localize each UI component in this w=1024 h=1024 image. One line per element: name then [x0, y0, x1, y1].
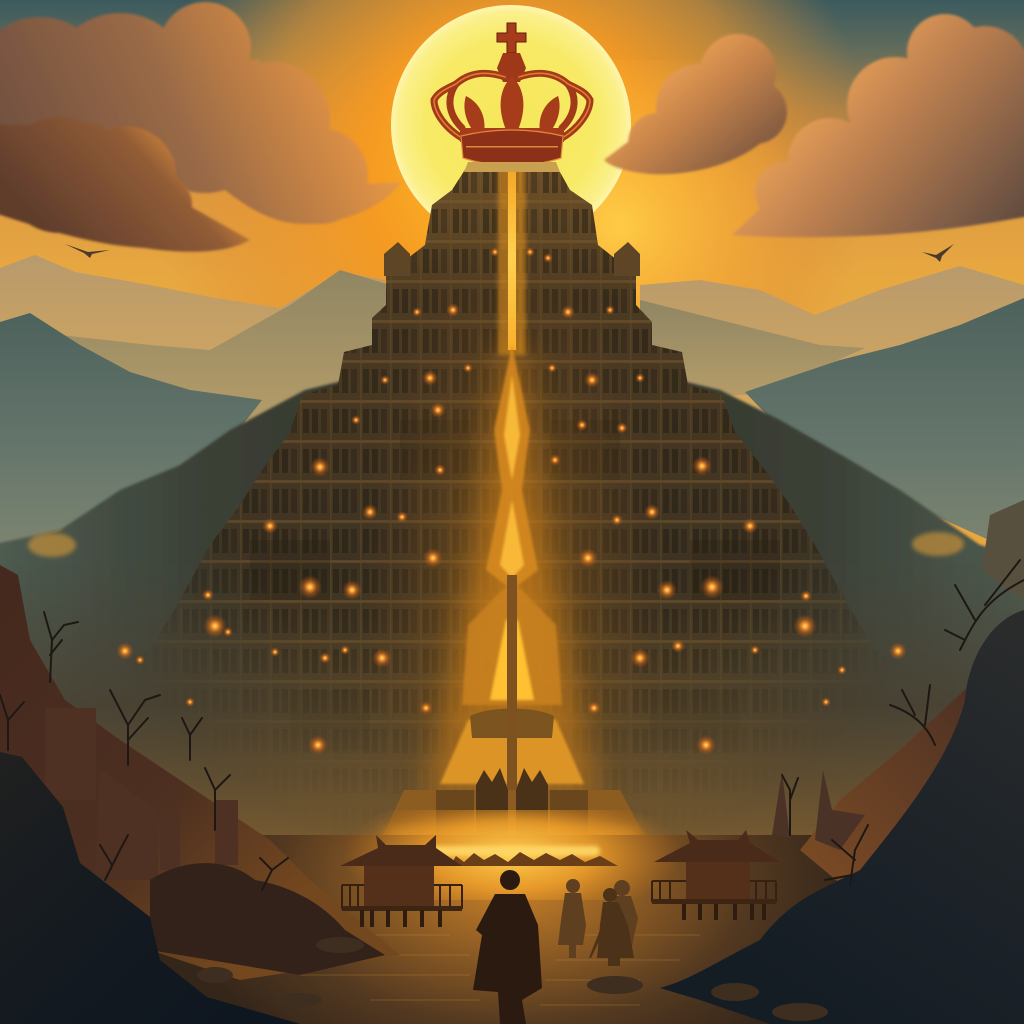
crown band: [461, 130, 563, 166]
left rocky slope: [0, 565, 400, 1024]
figures: [473, 870, 638, 1024]
crown: [434, 23, 590, 172]
crown leaves: [460, 76, 564, 142]
second figure: [558, 879, 586, 958]
fourth figure: [612, 880, 638, 955]
near mountains: [0, 298, 1024, 545]
glowing shrubs left and right: [28, 532, 964, 557]
cloud: far right: [732, 14, 1024, 237]
right rocky slope: [660, 500, 1024, 1024]
water stones: [197, 937, 828, 1021]
crowd silhouettes: [450, 852, 618, 866]
gate complex: [378, 768, 650, 849]
tower lamps: [116, 247, 907, 755]
cloud: lower left: [0, 117, 250, 252]
crown arches: [434, 73, 590, 138]
third figure: [589, 888, 634, 966]
forested hill behind tower: [0, 340, 1024, 850]
far mountains: [0, 255, 1024, 420]
tower side turrets: [384, 242, 640, 276]
dark foreground rocks left: [0, 752, 300, 1024]
pagoda hut: left: [340, 835, 462, 927]
main figure with cane: [473, 870, 542, 1024]
bare trees: [0, 560, 1024, 890]
tower: [162, 169, 862, 789]
crown cross: [497, 23, 526, 53]
ground: [0, 810, 1024, 1024]
pagoda hut: right: [652, 830, 780, 920]
cloud: centre right: [604, 34, 787, 174]
birds: [65, 244, 954, 262]
dark foreground rocks right: [660, 610, 1024, 1024]
sky background: [0, 0, 1024, 560]
crown orb: [497, 53, 526, 82]
central golden stream: [378, 165, 650, 849]
moon: [391, 5, 631, 245]
water ripples: [300, 935, 700, 1005]
cloud: upper left: [0, 2, 402, 224]
crown fringe: [464, 162, 560, 172]
